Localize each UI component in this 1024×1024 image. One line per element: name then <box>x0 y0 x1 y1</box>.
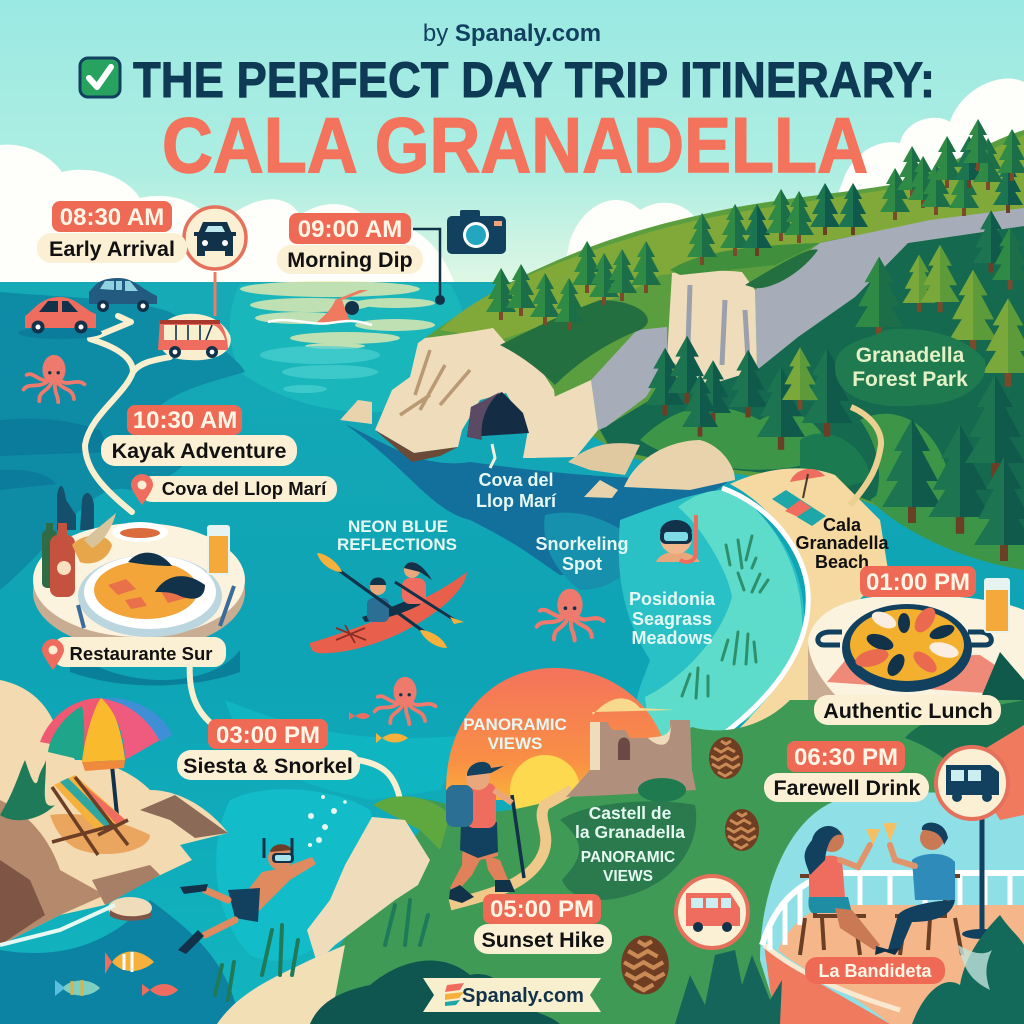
text: Castell de la Granadella: VIEWS <box>603 868 653 885</box>
icon: deck chair <box>52 775 128 855</box>
text: Cala Granadella Beach: Granadella <box>795 533 890 553</box>
decoration: dark silhouettes behind table <box>57 486 94 530</box>
icon: bus pin <box>936 747 1008 819</box>
panel: bottom-left rocks and beach <box>0 680 228 945</box>
icon: snorkeler head <box>656 515 700 562</box>
icon: swimmer <box>268 290 372 325</box>
label: 09:00 AM Morning Dip: Morning Dip <box>287 248 413 272</box>
panel: cream blob behind bus <box>159 314 231 360</box>
text: Posidonia Seagrass Meadows: Meadows <box>631 628 713 648</box>
icon: red car <box>18 297 102 339</box>
beach <box>722 468 888 745</box>
seaweed <box>215 900 428 1000</box>
label: La Bandideta <box>805 957 945 984</box>
path: itinerary route <box>85 316 815 915</box>
text: Panoramic Views on sun <box>463 715 567 753</box>
castle <box>566 720 696 802</box>
heading: Granadella Forest Park: Granadella <box>856 344 965 367</box>
icon: snorkeler diver <box>178 838 316 954</box>
icon: green check box <box>80 58 120 97</box>
label: Authentic Lunch: Authentic Lunch <box>823 699 993 723</box>
panel: La Bandideta terrace <box>760 725 1024 1024</box>
land: dark foliage right <box>905 700 1024 770</box>
label: 03:00 PM Siesta & Snorkel <box>177 719 360 780</box>
text: Cova del Llop Marí: Cova del <box>478 470 554 490</box>
land: bottom foliage <box>310 961 560 1024</box>
text: Cala Granadella Beach <box>795 515 890 572</box>
panel: lunch table <box>808 578 1024 700</box>
text: Posidonia Seagrass Meadows: Seagrass <box>632 609 712 629</box>
bushes on cliff tops <box>500 243 820 385</box>
logo ribbon: Spanaly.com <box>423 978 601 1012</box>
text: Cova del Llop Marí: Llop Marí <box>476 491 557 511</box>
icon: beach umbrella <box>40 698 172 825</box>
text: Castell de la Granadella: la Granadella <box>575 822 685 842</box>
marker near cave <box>490 444 495 468</box>
title line 2: CALA GRANADELLA <box>162 101 868 189</box>
path: sand trail <box>450 790 572 905</box>
text: Neon Blue Reflections <box>337 517 457 554</box>
sea <box>0 282 1024 1024</box>
text: Cala Granadella Beach: Beach <box>815 552 869 572</box>
label: Cova del Llop Marí pin <box>131 474 337 505</box>
icon: blue car <box>89 278 157 312</box>
connector: car pin to bus <box>214 272 216 316</box>
label: Restaurante Sur <box>42 637 226 670</box>
sand: bottom strip <box>217 945 345 1024</box>
label: 08:30 AM Early Arrival <box>37 201 187 263</box>
icon: camera <box>447 210 506 254</box>
icon: bus badge <box>676 876 748 948</box>
forest trees <box>486 119 1024 561</box>
land: dark forest <box>600 226 1024 562</box>
cliff beside hike trail <box>307 817 430 963</box>
panel: dark patch castle label <box>560 801 696 900</box>
land: top-right hillside <box>425 130 1024 570</box>
panel: lower-right land <box>300 700 1024 1024</box>
label: 10:30 AM Kayak Adventure: Kayak Adventure <box>112 439 286 463</box>
icon: hiker <box>446 762 524 903</box>
text: Neon Blue Reflections: REFLECTIONS <box>337 535 457 554</box>
label: 01:00 PM: 01:00 PM <box>866 569 970 596</box>
label: La Bandideta: La Bandideta <box>818 961 932 981</box>
text: Castell de la Granadella: PANORAMIC <box>581 849 675 866</box>
cliffs <box>340 208 1024 498</box>
connector: camera to swim spot <box>413 229 445 305</box>
text: Panoramic Views on sun: PANORAMIC <box>463 715 567 734</box>
land: lime ridge <box>440 135 1024 340</box>
icon: sun and sunset <box>446 668 675 825</box>
label: 05:00 PM Sunset Hike: Sunset Hike <box>481 928 605 952</box>
byline: by Spanaly.com <box>423 20 601 47</box>
icon: car pin <box>184 207 246 269</box>
logo ribbon: Spanaly.com: Spanaly.com <box>462 985 584 1007</box>
label: 03:00 PM Siesta & Snorkel: 03:00 PM <box>216 722 320 749</box>
icon: octopus left <box>24 355 84 402</box>
text: Snorkeling Spot: Spot <box>562 554 602 574</box>
sea: sun glitter <box>240 281 435 349</box>
label: 08:30 AM Early Arrival: Early Arrival <box>49 237 175 261</box>
path: forest trail <box>850 407 881 505</box>
label: 08:30 AM Early Arrival: 08:30 AM <box>60 204 164 231</box>
foliage: bottom centre <box>675 950 782 1024</box>
title line 1: THE PERFECT DAY TRIP ITINERARY: <box>133 52 935 108</box>
blob behind Forest Park name <box>835 329 986 406</box>
decoration: pale sparkle <box>958 945 992 990</box>
seagrass <box>682 536 768 698</box>
beach: white surf edge <box>716 488 808 740</box>
heading: Granadella Forest Park <box>852 344 968 391</box>
icon: parasol and towels <box>772 469 826 526</box>
label: 10:30 AM Kayak Adventure <box>101 405 297 466</box>
land: mid-green forest patches <box>640 407 1024 570</box>
label: 05:00 PM Sunset Hike: 05:00 PM <box>490 896 594 923</box>
bubbles <box>308 795 347 847</box>
land: hill highlight <box>373 796 450 850</box>
background: sky <box>0 0 1024 290</box>
heading: Granadella Forest Park: Forest Park <box>852 368 968 391</box>
icon: fish <box>55 712 408 996</box>
clouds <box>0 78 1024 290</box>
label: 09:00 AM Morning Dip: 09:00 AM <box>298 216 402 243</box>
label: Restaurante Sur: Restaurante Sur <box>70 643 212 664</box>
text: Snorkeling Spot <box>535 534 629 574</box>
icon: octopus lower <box>375 677 435 724</box>
label: Cova del Llop Marí pin: Cova del Llop Marí <box>162 478 327 499</box>
sea: colour patches <box>0 282 804 1024</box>
text: Cova del Llop Marí <box>476 470 557 511</box>
label: 10:30 AM Kayak Adventure: 10:30 AM <box>133 407 237 434</box>
label: 06:30 PM Farewell Drink <box>764 741 929 802</box>
label: 05:00 PM Sunset Hike <box>474 894 612 954</box>
icon: bus <box>158 320 228 358</box>
icon: octopus centre <box>537 589 603 640</box>
icon: pine cones <box>621 737 759 994</box>
text: Posidonia Seagrass Meadows <box>629 589 716 648</box>
label: 06:30 PM Farewell Drink: Farewell Drink <box>774 776 921 800</box>
icon: kayak with two paddlers <box>310 553 467 653</box>
text: Posidonia Seagrass Meadows: Posidonia <box>629 589 716 609</box>
text: Snorkeling Spot: Snorkeling <box>535 534 629 554</box>
text: Castell de la Granadella <box>575 803 685 885</box>
foliage: bottom right <box>912 915 1024 1024</box>
label: 03:00 PM Siesta & Snorkel: Siesta & Snorkel <box>183 754 353 778</box>
text: Panoramic Views on sun: VIEWS <box>488 734 542 753</box>
label: 09:00 AM Morning Dip <box>277 213 423 274</box>
panel: restaurant table <box>33 513 245 650</box>
text: Cala Granadella Beach: Cala <box>823 515 862 535</box>
text: Neon Blue Reflections: NEON BLUE <box>348 517 448 536</box>
icon: couple toasting <box>800 823 962 955</box>
label: 06:30 PM Farewell Drink: 06:30 PM <box>794 744 898 771</box>
text: Castell de la Granadella: Castell de <box>589 803 672 823</box>
